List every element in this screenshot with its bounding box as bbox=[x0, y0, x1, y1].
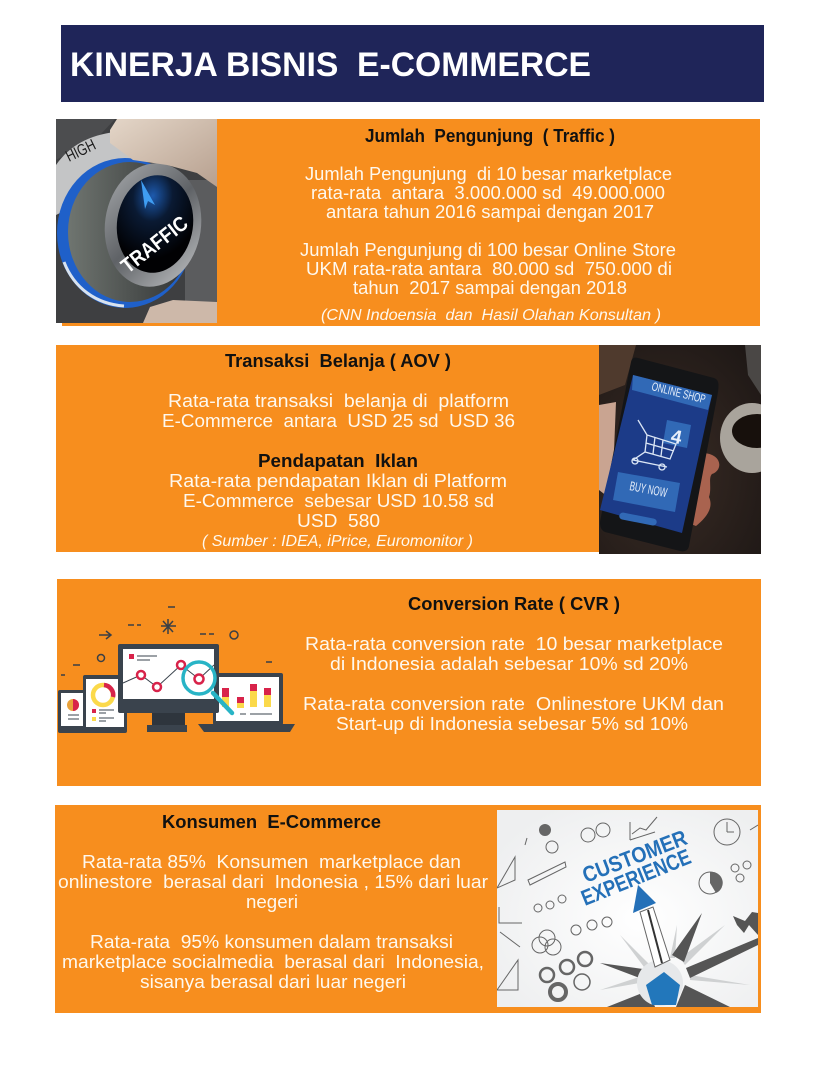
photo: customer experience compass bbox=[497, 810, 758, 1007]
badge number: 4 bbox=[669, 426, 684, 449]
gears bbox=[540, 968, 554, 982]
text block: online store conversion bbox=[303, 694, 724, 734]
finger top bbox=[110, 119, 217, 187]
text block: marketplace visitors: Jumlah Pengunjung di 10 besar marketplace bbox=[305, 164, 672, 184]
text block: marketplace conversion bbox=[305, 634, 723, 674]
title: KINERJA BISNIS E-COMMERCE bbox=[70, 46, 591, 84]
text block: transactions: Rata-rata transaksi belanja di platform bbox=[168, 391, 509, 411]
text block: consumer origin: negeri bbox=[246, 892, 298, 912]
text block: transactions bbox=[162, 391, 515, 431]
text block: transactions: E-Commerce antara USD 25 sd USD 36 bbox=[162, 411, 515, 431]
panel: traffic bbox=[56, 119, 760, 326]
text block: online store visitors: Jumlah Pengunjung di 100 besar Online Store bbox=[300, 240, 676, 260]
hand bbox=[599, 402, 616, 500]
photo: traffic knob bbox=[56, 119, 217, 323]
knob label: TRAFFIC bbox=[117, 212, 193, 278]
panel: transactions bbox=[56, 345, 784, 554]
heading: consumers: Konsumen E-Commerce bbox=[162, 812, 381, 832]
line chart bbox=[123, 661, 214, 691]
text block: marketplace conversion: di Indonesia adalah sebesar 10% sd 20% bbox=[330, 654, 688, 674]
text block: social media consumers bbox=[62, 932, 484, 992]
knob arrow bbox=[141, 180, 155, 209]
heading: transactions: Transaksi Belanja ( AOV ) bbox=[225, 351, 451, 371]
text block: ad revenue: E-Commerce sebesar USD 10.58 sd bbox=[183, 491, 494, 511]
magnifier bbox=[183, 662, 215, 694]
text block: consumer origin: onlinestore berasal dari Indonesia , 15% dari luar bbox=[58, 872, 488, 892]
text block: consumer origin: Rata-rata 85% Konsumen marketplace dan bbox=[82, 852, 461, 872]
panel: conversion rate bbox=[57, 579, 761, 786]
photo: online shop phone bbox=[599, 345, 761, 554]
text block: online store conversion: Rata-rata conversion rate Onlinestore UKM dan bbox=[303, 694, 724, 714]
laptop bbox=[213, 673, 283, 725]
phone body bbox=[600, 358, 719, 551]
heading: ad revenue: Pendapatan Iklan bbox=[258, 451, 418, 471]
decorative marks bbox=[61, 607, 272, 675]
text block: online store visitors: UKM rata-rata antara 80.000 sd 750.000 di bbox=[306, 259, 672, 279]
text block: online store visitors bbox=[300, 240, 676, 298]
desktop monitor bbox=[118, 644, 219, 713]
phone screen bbox=[600, 375, 712, 533]
title banner bbox=[61, 25, 764, 102]
knob scale label: HIGH bbox=[63, 137, 99, 166]
tablet two bbox=[83, 675, 127, 733]
badge bbox=[663, 420, 691, 448]
text block: marketplace conversion: Rata-rata conversion rate 10 besar marketplace bbox=[305, 634, 723, 654]
buy label: BUY NOW bbox=[628, 478, 669, 500]
source: traffic: (CNN Indoensia dan Hasil Olahan Konsultan ) bbox=[321, 307, 661, 324]
source: transactions: ( Sumber : IDEA, iPrice, Euromonitor ) bbox=[202, 533, 473, 550]
shop label: ONLINE SHOP bbox=[650, 379, 707, 406]
text block: online store visitors: tahun 2017 sampai dengan 2018 bbox=[353, 278, 627, 298]
text block: online store conversion: Start-up di Indonesia sebesar 5% sd 10% bbox=[336, 714, 688, 734]
knob body bbox=[57, 158, 193, 308]
sketch icons bbox=[497, 817, 758, 1000]
tablet bbox=[58, 690, 86, 733]
text block: consumer origin bbox=[58, 852, 488, 912]
cart icon bbox=[632, 420, 676, 470]
text block: marketplace visitors: antara tahun 2016 sampai dengan 2017 bbox=[326, 202, 654, 222]
heading: conversion rate: Conversion Rate ( CVR ) bbox=[408, 594, 620, 614]
text block: social media consumers: Rata-rata 95% konsumen dalam transaksi bbox=[90, 932, 453, 952]
compass arrow bbox=[633, 885, 656, 913]
photo headline: CUSTOMER bbox=[579, 825, 691, 888]
coffee cup bbox=[720, 403, 761, 473]
text block: ad revenue bbox=[169, 471, 507, 531]
illustration: analytics screens bbox=[58, 607, 295, 733]
text block: ad revenue: USD 580 bbox=[297, 511, 380, 531]
text block: social media consumers: marketplace socialmedia berasal dari Indonesia, bbox=[62, 952, 484, 972]
finger bottom bbox=[143, 300, 217, 323]
compass needle bbox=[640, 907, 670, 967]
panel: consumers bbox=[55, 805, 761, 1013]
shop bar bbox=[632, 375, 712, 410]
buy button bbox=[613, 472, 680, 512]
heading: traffic: Jumlah Pengunjung ( Traffic ) bbox=[365, 126, 615, 146]
compass rose bbox=[600, 925, 750, 990]
text block: ad revenue: Rata-rata pendapatan Iklan di Platform bbox=[169, 471, 507, 491]
text block: social media consumers: sisanya berasal dari luar negeri bbox=[140, 972, 406, 992]
text block: marketplace visitors bbox=[305, 164, 672, 222]
silver dial bbox=[56, 132, 135, 215]
photo subheadline: EXPERIENCE bbox=[578, 844, 694, 911]
text block: marketplace visitors: rata-rata antara 3.000.000 sd 49.000.000 bbox=[311, 183, 665, 203]
